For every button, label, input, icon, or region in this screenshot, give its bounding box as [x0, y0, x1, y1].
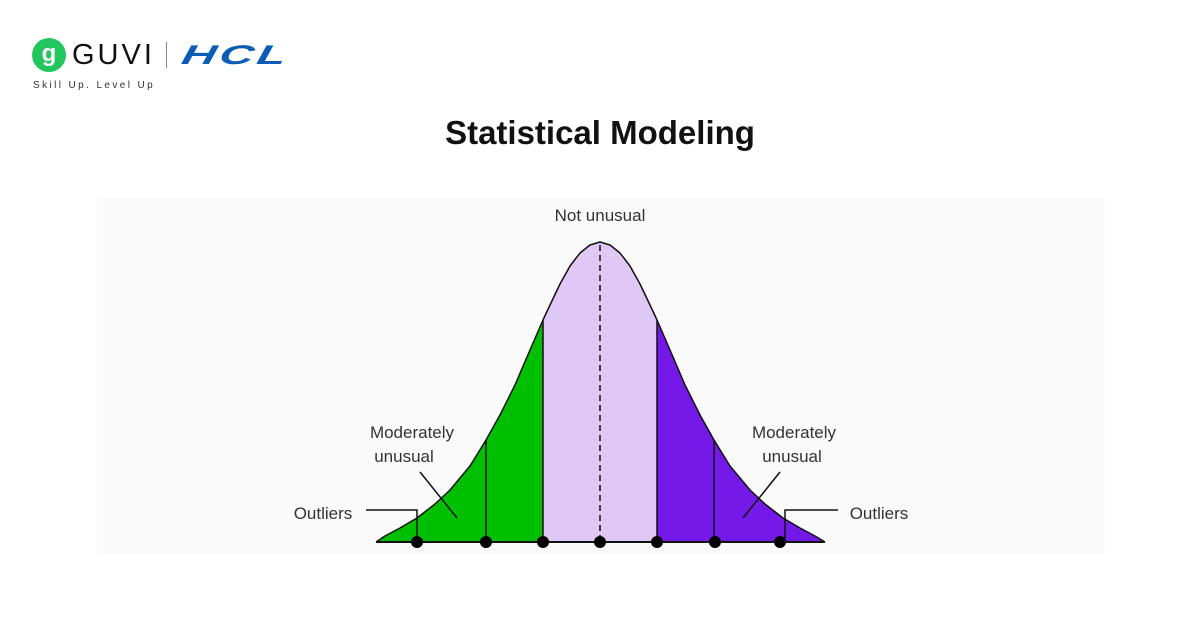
labels: Moderately: [370, 423, 455, 442]
labels: Not unusual: [555, 206, 645, 225]
tagline: Skill Up. Level Up: [33, 80, 155, 91]
labels: unusual: [374, 447, 434, 466]
bell curve fills: [378, 242, 822, 541]
labels: [294, 206, 908, 523]
guvi text: GUVI: [72, 39, 155, 71]
labels: Moderately: [752, 423, 837, 442]
labels: Outliers: [850, 504, 908, 523]
points: [411, 536, 786, 548]
labels: Outliers: [294, 504, 352, 523]
hcl text: HCL: [179, 40, 293, 70]
title: Statistical Modeling: [445, 114, 755, 151]
icon: guvi circle: g: [42, 40, 56, 67]
labels: unusual: [762, 447, 822, 466]
icon: guvi circle: [32, 38, 66, 72]
chart panel: [294, 209, 908, 548]
logo: [32, 38, 293, 91]
curve outline: [376, 242, 825, 542]
